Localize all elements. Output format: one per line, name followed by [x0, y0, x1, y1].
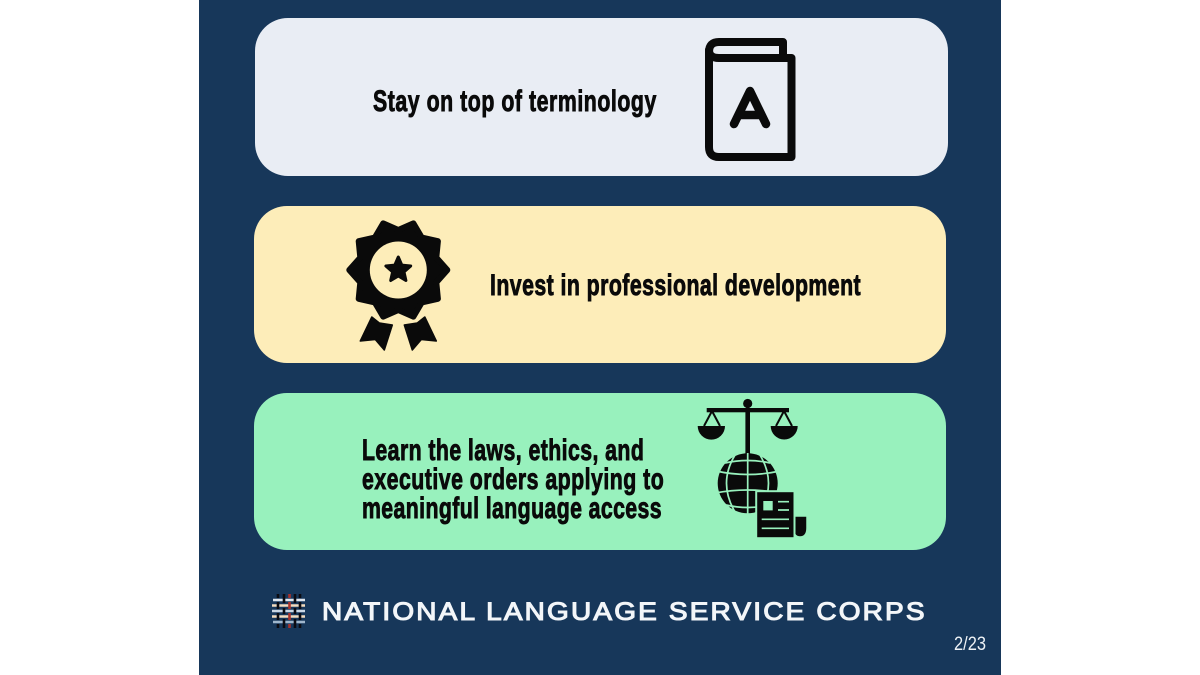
text: laws, ethics, executive orders: Learn the laws, ethics, and	[362, 432, 644, 467]
text: stay on top of terminology: Stay on top of terminology	[373, 83, 657, 118]
navy slide background	[199, 0, 1001, 675]
icon: award rosette	[349, 223, 447, 350]
text: laws, ethics, executive orders	[362, 432, 664, 525]
text: laws, ethics, executive orders: executive orders applying to	[362, 461, 664, 496]
panel: terminology	[255, 18, 948, 176]
text: laws, ethics, executive orders: meaningful language access	[362, 490, 662, 525]
text: invest in professional development: Invest in professional development	[490, 267, 861, 302]
page number: 2/23	[954, 634, 986, 655]
logo: woven emblem	[272, 594, 305, 628]
icon: scales of justice over globe and document	[698, 399, 807, 538]
panel: professional development	[254, 206, 946, 363]
icon: book with letter A	[709, 42, 792, 157]
panel: laws and ethics	[254, 393, 946, 550]
logo text: national language service corps: NATIONAL LANGUAGE SERVICE CORPS	[322, 597, 925, 626]
